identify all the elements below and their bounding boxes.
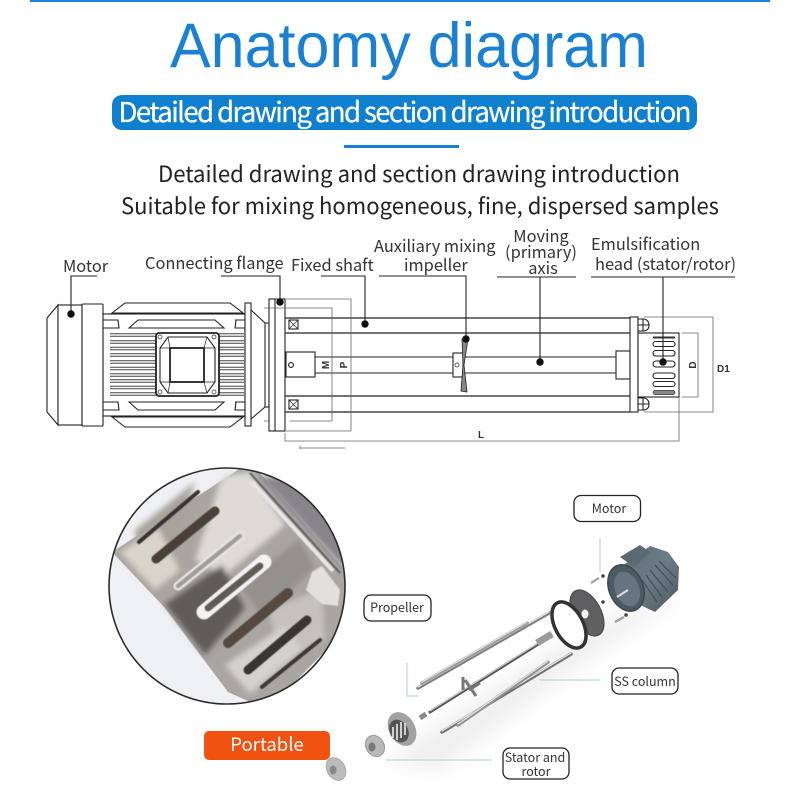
label: motor [574,496,640,522]
dimension lines: P [339,361,350,368]
label: stator and rotor: rotor [521,761,551,780]
callout: fixed shaft: Fixed shaft [291,252,374,276]
callout: moving primary axis: Moving [513,223,569,247]
badge: portable: Portable [230,731,304,757]
callout: moving primary axis [497,223,577,366]
technical drawing: section view [47,223,736,449]
callout: emulsification head [591,231,736,366]
leader lines [386,538,600,760]
callout: motor [63,253,109,318]
motor assembly [601,545,679,617]
magnified photo of stator head [108,467,346,705]
callout: connecting flange: Connecting flange [145,250,284,274]
fixed shaft column [285,318,630,412]
connecting flange [245,299,285,431]
label: propeller [364,595,431,621]
label: SS column: SS column [614,671,676,690]
intro text: Suitable for mixing homogeneous, fine, dispersed samples [121,189,719,221]
motor outline [47,303,250,427]
screws [591,578,624,622]
exploded view [322,538,690,784]
mixing impeller [453,339,468,392]
callout: auxiliary mixing impeller [374,233,496,343]
subtitle pill: Detailed drawing and section drawing introduction [118,90,692,130]
stainless columns [418,612,571,732]
cooling fins [110,335,244,394]
upper ring [258,476,350,570]
slots [139,492,320,687]
mounting plate [563,584,611,642]
intro text: Detailed drawing and section drawing introduction [158,157,680,189]
rotor [362,732,388,760]
gasket ring [545,596,593,654]
pill underline [344,145,459,148]
terminal box [156,333,219,396]
callout: emulsification head: Emulsification [591,231,700,255]
dimension lines [264,299,730,449]
label: stator and rotor: Stator and [505,747,565,766]
drive shaft and impeller [420,634,552,718]
dimension lines: D [688,361,699,369]
label: motor: Motor [592,498,626,517]
callout: motor: Motor [63,253,109,277]
label: stator and rotor [503,747,569,780]
callout: moving primary axis: (primary) [505,239,577,263]
callout: auxiliary mixing impeller: impeller [404,252,468,276]
soft shadow [385,590,690,770]
badge: portable [204,731,330,760]
top accent bar [30,0,770,2]
label: propeller: Propeller [370,597,424,616]
dimension lines: D1 [717,364,730,375]
callout: emulsification head: head (stator/rotor) [595,251,736,275]
spare rotor [322,754,350,784]
title: Anatomy diagram [170,11,648,81]
hex nut [306,566,340,606]
callout: moving primary axis: axis [528,255,558,279]
callout: fixed shaft [291,252,374,328]
callout: auxiliary mixing impeller: Auxiliary mixing [374,233,496,257]
intro text [121,157,719,221]
steel body [112,462,350,710]
dimension lines: M [321,361,332,369]
label: SS column [612,668,678,694]
callout: connecting flange [145,250,284,306]
moving shaft [286,351,630,379]
emulsification head [630,317,679,412]
dimension lines: L [478,430,484,441]
stator [382,707,422,751]
